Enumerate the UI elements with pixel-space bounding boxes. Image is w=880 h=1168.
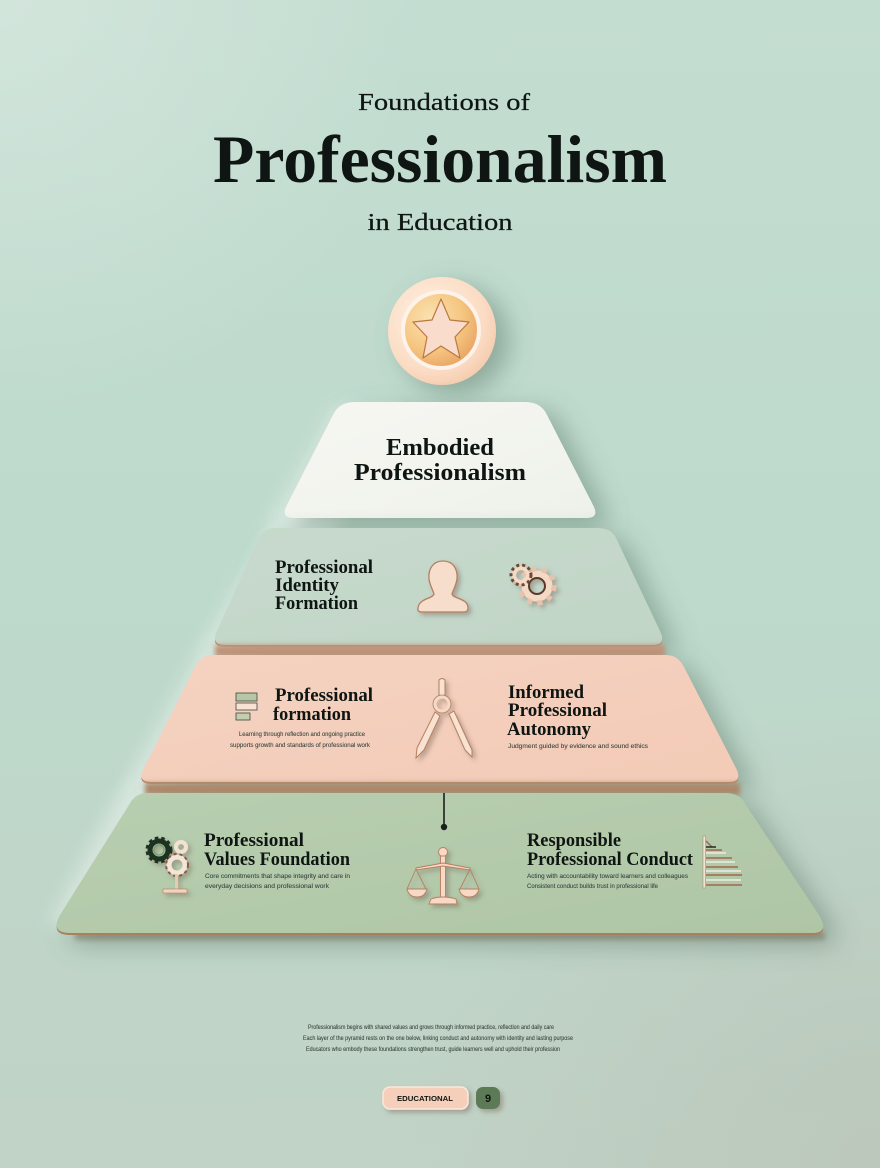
heading: Responsible Professional Conduct (527, 831, 694, 870)
text: values description: Core commitments that shape integrity and care in (205, 874, 350, 880)
text: conduct description: Acting with accountability toward learners and colleagues (527, 874, 688, 880)
text: footer note (303, 1025, 574, 1053)
text: formation description: supports growth and standards of professional work (230, 743, 371, 749)
text: conduct description: Consistent conduct builds trust in professional life (527, 884, 659, 890)
icon: person (418, 561, 468, 612)
button: label pill (383, 1087, 468, 1109)
text: footer note: Educators who embody these foundations strengthen trust, guide learners well and uphold their profession (306, 1047, 560, 1053)
heading: Professional Identity Formation: Identity (275, 576, 340, 596)
heading: Responsible Professional Conduct: Responsible (527, 831, 621, 851)
heading: Professional Identity Formation: Formation (275, 594, 359, 614)
panel: Professional Identity Formation (215, 528, 662, 647)
heading: Professional Values Foundation: Values Foundation (204, 850, 351, 870)
heading: Professional Identity Formation: Professional (275, 558, 373, 578)
badge: page number: 9 (485, 1093, 491, 1105)
heading: Informed Professional Autonomy: Professional (508, 701, 607, 721)
heading: Professional Values Foundation: Professional (204, 831, 304, 851)
icon: documents (236, 693, 257, 720)
text: formation description: Learning through reflection and ongoing practice (239, 732, 366, 738)
title: line one: Foundations of (358, 90, 530, 116)
text: conduct description (527, 874, 688, 890)
panel: Professional Values Foundation and Responsible Professional Conduct (57, 793, 823, 935)
text: autonomy description: Judgment guided by evidence and sound ethics (508, 744, 648, 750)
text: formation description (230, 732, 371, 749)
heading: Professional formation: Professional (275, 686, 373, 706)
heading: Professional Values Foundation (204, 831, 351, 870)
icon: compass (416, 678, 472, 758)
icon: gears (511, 565, 554, 603)
badge: page number (476, 1087, 500, 1109)
button: label pill: EDUCATIONAL (397, 1094, 453, 1103)
icon: scales (407, 848, 479, 904)
text: values description: everyday decisions and professional work (205, 884, 330, 890)
heading: Embodied Professionalism: Professionalism (354, 460, 526, 486)
icon: values gears (147, 838, 188, 893)
panel: Embodied Professionalism (285, 402, 595, 518)
connector line (441, 793, 447, 830)
heading: Professional formation (273, 686, 373, 725)
heading: Embodied Professionalism: Embodied (386, 435, 495, 461)
text: footer note: Professionalism begins with shared values and grows through informed practice, reflection and daily care (308, 1025, 555, 1031)
text: values description (205, 874, 350, 890)
copper shadow above tier three (215, 645, 665, 657)
icon: tiered chart (703, 836, 742, 888)
title: Professionalism: Professionalism (213, 121, 667, 197)
heading: Embodied Professionalism (354, 435, 526, 486)
copper shadow above tier four (145, 783, 740, 795)
title block (213, 90, 667, 236)
icon: star medallion (388, 277, 496, 385)
heading: Responsible Professional Conduct: Professional Conduct (527, 850, 694, 870)
text: footer note: Each layer of the pyramid rests on the one below, linking conduct and autonomy with identity and lasting purpose (303, 1036, 574, 1042)
brown shadow below tier four (75, 932, 825, 940)
heading: Professional Identity Formation (275, 558, 373, 614)
heading: Informed Professional Autonomy: Autonomy (507, 720, 592, 740)
panel: Professional formation and Informed Professional Autonomy (141, 655, 738, 784)
heading: Informed Professional Autonomy (507, 683, 607, 740)
title: line three: in Education (368, 210, 512, 236)
heading: Informed Professional Autonomy: Informed (508, 683, 585, 703)
heading: Professional formation: formation (273, 705, 352, 725)
